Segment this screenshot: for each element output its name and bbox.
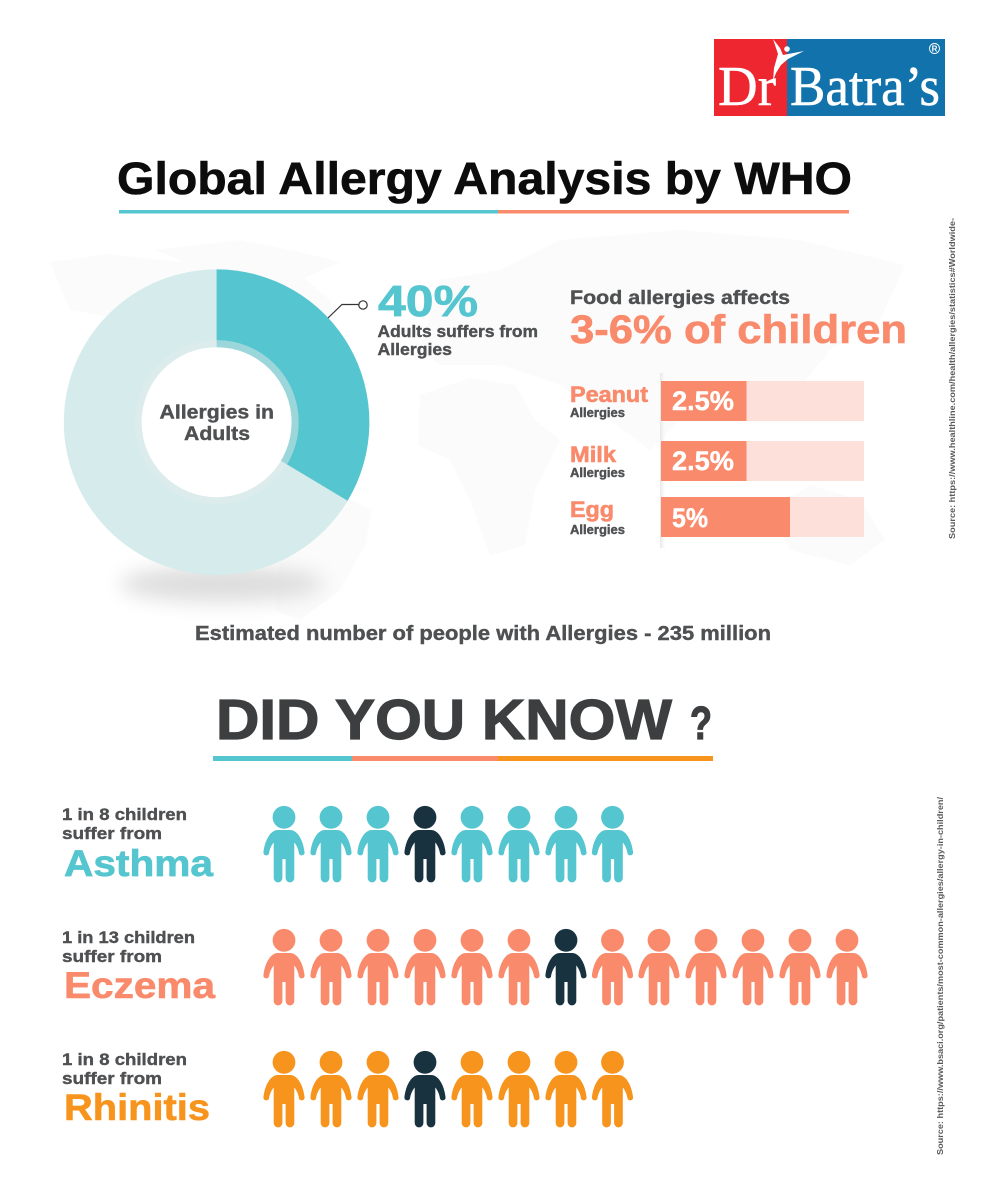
logo text: [718, 56, 940, 118]
text: asthma: 1 in 8 children: [62, 805, 187, 824]
text: asthma: [62, 805, 213, 884]
text: eczema: 1 in 13 children: [62, 928, 195, 947]
bar: milk: Milk: [570, 442, 617, 467]
background world map: [50, 230, 905, 620]
callout: 40 percent adults: 40%: [378, 277, 478, 326]
text: asthma: suffer from: [62, 824, 162, 843]
donut center label: Adults: [184, 424, 250, 445]
donut chart: allergies in adults: [64, 269, 369, 602]
source note: healthline: Source: https://www.healthline.com/health/allergies/statistics#Worldwide-: [947, 218, 957, 539]
donut center label: [160, 402, 274, 445]
text: eczema: [62, 928, 215, 1006]
bar: egg: 5%: [672, 503, 708, 533]
text: asthma: Asthma: [64, 843, 213, 884]
logo: Dr Batra's: [714, 39, 945, 118]
text: rhinitis: Rhinitis: [64, 1087, 210, 1128]
callout connector: [328, 301, 367, 318]
text: eczema: suffer from: [62, 947, 162, 966]
callout: 40 percent adults: Adults suffers from: [378, 323, 538, 341]
food allergies heading: Food allergies affects: [570, 287, 790, 309]
bar: peanut: Allergies: [570, 406, 625, 420]
bar: milk: 2.5%: [672, 446, 734, 476]
food allergies heading: 3-6% of children: [570, 308, 907, 352]
source note: bsaci: Source: https://www.bsaci.org/patients/most-common-allergies/allergy-in-children/: [935, 796, 945, 1155]
food allergies heading: [570, 287, 907, 352]
logo text: Dr: [718, 56, 776, 118]
bar: egg: Allergies: [570, 523, 625, 537]
title: Global Allergy Analysis by WHO: [117, 153, 852, 204]
donut center label: Allergies in: [160, 402, 274, 424]
heading: did you know: DID YOU KNOW: [216, 688, 672, 752]
text: rhinitis: [62, 1050, 210, 1128]
callout: 40 percent adults: [378, 277, 538, 359]
bar: milk: [570, 441, 864, 481]
text: rhinitis: 1 in 8 children: [62, 1050, 187, 1069]
people row: rhinitis, 1 in 8: [263, 1051, 633, 1127]
title underline: [119, 210, 849, 214]
bar: peanut: Peanut: [570, 382, 649, 407]
registered mark: R: [932, 44, 938, 54]
bar: peanut: 2.5%: [672, 386, 734, 416]
bar: peanut: [570, 381, 864, 421]
logo text: Batra’s: [790, 56, 940, 118]
heading: did you know: ?: [690, 697, 712, 749]
registered mark: [930, 44, 940, 54]
people row: asthma, 1 in 8: [263, 806, 633, 882]
people row: eczema, 1 in 13: [263, 929, 868, 1005]
text: eczema: Eczema: [64, 965, 215, 1006]
heading underline: [213, 756, 713, 761]
estimated number text: Estimated number of people with Allergies - 235 million: [195, 623, 771, 645]
bar: egg: Egg: [570, 497, 614, 522]
callout: 40 percent adults: Allergies: [378, 341, 452, 359]
bar: milk: Allergies: [570, 466, 625, 480]
bar: egg: [570, 497, 864, 537]
bar chart: food allergies: [570, 373, 864, 548]
icon: swoosh figure: [773, 39, 804, 81]
text: rhinitis: suffer from: [62, 1069, 162, 1088]
